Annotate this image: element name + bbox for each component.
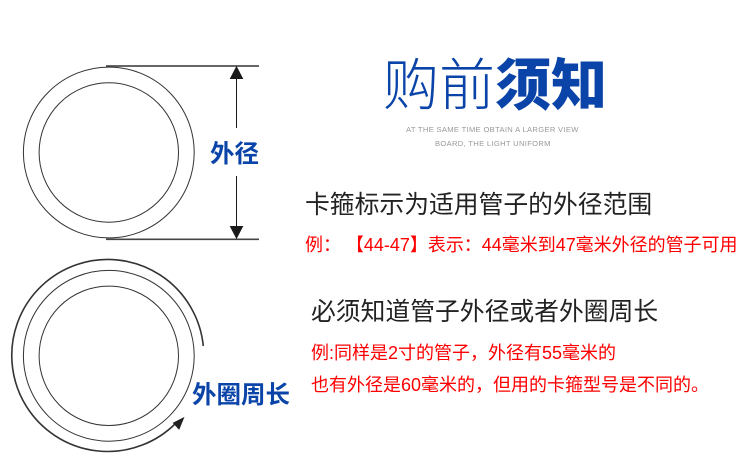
example line 2: 也有外径是60毫米的，但用的卡箍型号是不同的。 (311, 375, 709, 395)
subtitle line 1: AT THE SAME TIME OBTAIN A LARGER VIEW (406, 125, 579, 134)
arrow: down (230, 176, 242, 238)
arrow: up (230, 67, 242, 128)
circumference arc (12, 259, 203, 451)
example line 1: 例:同样是2寸的管子，外径有55毫米的 (311, 343, 616, 363)
arrow head (174, 418, 184, 429)
diagram: outer diameter (22, 65, 259, 240)
example: 44-47: 例： 【44-47】表示：44毫米到47毫米外径的管子可用 (305, 235, 738, 255)
heading: must know diameter or circumference: 必须知道管子外径或者外圈周长 (311, 299, 658, 326)
outer ring circle (23, 67, 194, 238)
heading: tube outer diameter range: 卡箍标示为适用管子的外径范围 (305, 192, 652, 219)
label: outer circumference: 外圈周长 (192, 382, 290, 409)
diagram: outer circumference (10, 258, 204, 452)
title: 购前须知 (383, 54, 607, 117)
bottom tangent line (106, 238, 259, 240)
subtitle line 2: BOARD, THE LIGHT UNIFORM (435, 139, 551, 148)
outer ring circle (23, 270, 194, 441)
inner ring circle (39, 83, 178, 222)
top tangent line (106, 65, 259, 67)
label: outer diameter: 外径 (210, 141, 259, 168)
inner ring circle (39, 286, 178, 425)
